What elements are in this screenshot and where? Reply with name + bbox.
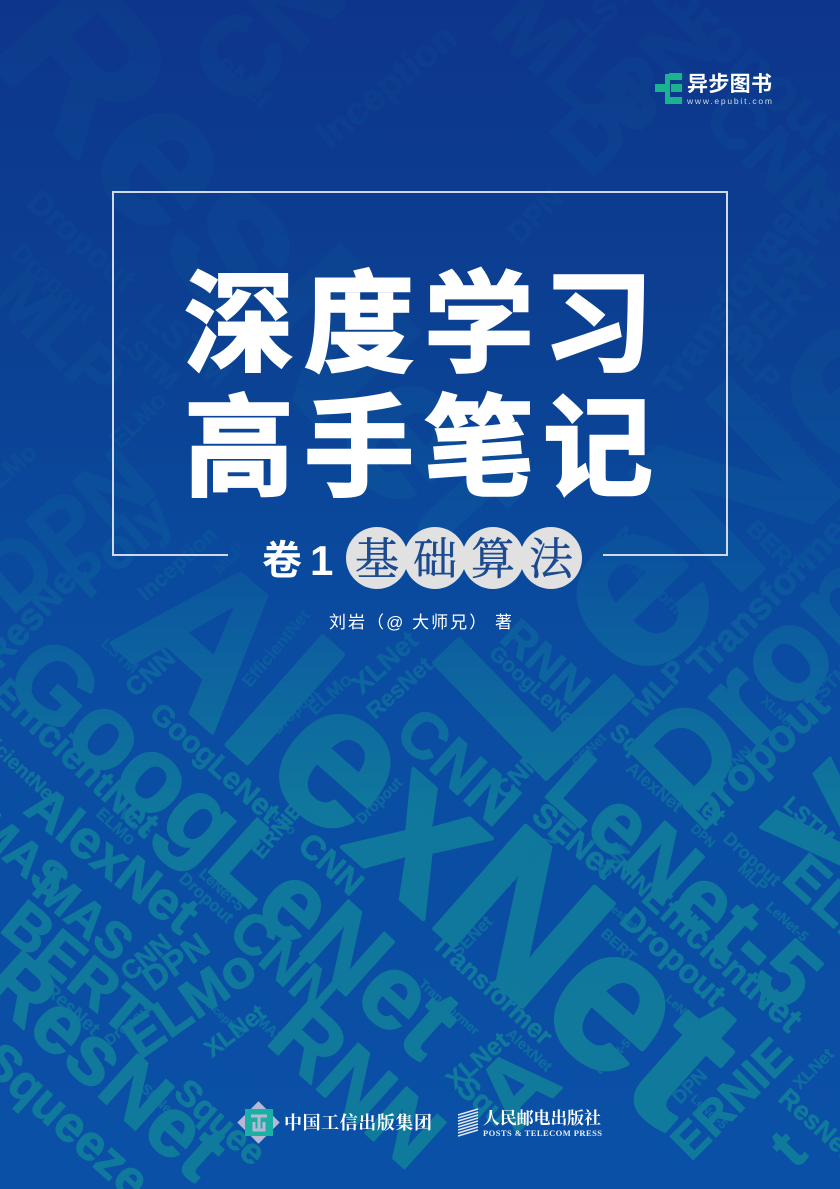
medium words lower right: LeNet-5 — [592, 1036, 633, 1077]
faint upper words: ELMo — [104, 386, 172, 454]
icon: green E cross mark — [655, 73, 682, 104]
medium words lower right: Dropout — [613, 900, 733, 1013]
medium words lower right: SENet — [526, 795, 624, 886]
medium words lower right: ERNIE — [661, 1029, 803, 1170]
medium words lower right: SENet — [569, 729, 610, 770]
title line 1: 深度学习 — [184, 264, 653, 387]
medium words lower right: GoogLeNet — [492, 838, 552, 898]
medium words lower left: ERNIE — [248, 799, 307, 863]
medium words lower left: SENet — [138, 1080, 180, 1120]
medium words lower left: DPN — [136, 926, 216, 999]
medium words lower left: Squee — [167, 1070, 274, 1173]
faint upper words: LeNet — [195, 36, 279, 116]
faint upper words: MLP — [209, 539, 248, 578]
faint upper words: LSTM — [134, 295, 239, 396]
title line 2: 高手笔记 — [184, 388, 653, 511]
medium words lower left: MAS — [23, 858, 144, 972]
press english name: POSTS & TELECOM PRESS — [483, 1128, 602, 1138]
faint upper words: LSTM — [792, 446, 835, 489]
medium words lower right: LeNet-5 — [688, 1092, 730, 1132]
large word: AlexNet: AlexNet — [80, 505, 785, 1166]
medium words lower right: BERT — [597, 925, 639, 965]
group name: 中国工信出版集团 — [284, 1112, 432, 1133]
faint upper words: VGG — [767, 421, 804, 458]
faint upper words: MLP — [715, 324, 788, 398]
medium words lower left: LSTM — [97, 635, 141, 677]
author: 刘岩（@ 大师兄） 著 — [329, 613, 512, 632]
logo url: www.epubit.com — [686, 96, 772, 106]
volume label — [262, 537, 333, 584]
publisher logo: China industry group — [237, 1101, 432, 1144]
medium words lower right: LeNet-5 — [763, 898, 812, 945]
medium words lower right: DPN — [688, 821, 718, 851]
medium words lower right: RNN — [721, 743, 756, 778]
faint upper words: SENet — [741, 389, 795, 445]
medium words lower left: Dropout — [102, 999, 157, 1049]
medium words lower right: LSTM — [779, 791, 840, 850]
medium words lower right: LeNet-5 — [663, 992, 705, 1032]
title frame — [113, 192, 727, 555]
medium words lower left: XLNet — [199, 999, 271, 1063]
medium words lower right: RNN — [491, 609, 600, 714]
medium words lower right: AlexNet — [502, 1025, 555, 1075]
medium words lower right: Squ — [450, 1071, 515, 1133]
medium words lower left: ELMo — [304, 670, 357, 720]
volume label: 卷 — [262, 539, 302, 583]
medium words lower left: CNN — [119, 642, 181, 702]
medium words lower right: SqueezeNet — [604, 718, 731, 831]
medium words lower left: RNN — [251, 983, 462, 1187]
medium words lower right: NIN — [608, 854, 657, 902]
medium words lower right: A — [454, 1025, 579, 1150]
medium words lower left: Inception — [203, 998, 248, 1040]
medium words lower left: CNN — [218, 897, 350, 1025]
faint upper words: Inception — [133, 522, 222, 606]
faint upper words: BERT — [715, 247, 840, 372]
medium words lower right: Transformer — [416, 976, 482, 1038]
faint upper words: Dropout — [6, 237, 101, 327]
subtitle text: 基础算法 — [355, 535, 574, 584]
medium words lower left: MAS — [252, 1012, 288, 1047]
faint upper words: Transformer — [617, 549, 701, 633]
medium words lower right: SENet — [447, 912, 496, 961]
press name: 人民邮电出版社 — [483, 1109, 601, 1128]
publisher logo: Posts and Telecom Press — [458, 1109, 602, 1138]
medium words lower left — [0, 606, 462, 1189]
faint upper words: NIN — [611, 522, 653, 564]
medium words lower left: Dropout — [175, 869, 237, 927]
medium words lower left: ELMo — [263, 803, 299, 838]
faint upper words: DPN — [502, 182, 570, 250]
faint upper words: Inception — [309, 16, 465, 157]
medium words lower left: LeNet-5 — [195, 865, 248, 915]
medium words lower right: GoogLeNet — [485, 642, 584, 734]
medium words lower left: ResNet — [41, 980, 104, 1040]
medium words lower left: ELMo — [112, 936, 267, 1070]
medium words lower right: CNN — [519, 830, 563, 874]
medium words lower right — [383, 500, 840, 1179]
medium words lower left: VGG — [114, 804, 155, 843]
medium words lower left: GoogLeNet — [143, 697, 286, 829]
medium words lower right: XLNet — [441, 1026, 515, 1095]
icon: diamond and seal — [237, 1101, 280, 1144]
volume label: 1 — [310, 537, 333, 584]
medium words lower right: Transformer — [426, 927, 559, 1051]
faint upper words: BERT — [741, 514, 809, 582]
medium words lower left: AlexNet — [15, 774, 210, 945]
medium words lower right: CNN — [593, 840, 634, 883]
medium words lower right: ResNet — [603, 898, 639, 933]
medium words lower left: CNN — [115, 927, 177, 987]
medium words lower right: MLP — [626, 654, 693, 723]
title — [184, 264, 653, 511]
medium words lower left: Dropout — [353, 775, 406, 828]
medium words lower right: XLNet — [789, 1044, 838, 1093]
medium words lower right: MLP — [734, 860, 771, 896]
medium words lower left: Dropout — [269, 685, 322, 738]
medium words lower left: ResNet — [361, 651, 437, 724]
medium words lower right: XLNet — [758, 692, 799, 732]
medium words lower right: CNN — [383, 693, 534, 839]
faint upper words — [0, 0, 840, 676]
medium words lower right: AlexNet — [622, 758, 687, 816]
icon: stacked book — [458, 1109, 478, 1136]
medium words lower left: XLNet — [346, 625, 424, 699]
logo name: 异步图书 — [687, 73, 772, 96]
medium words lower right: EfficientNet — [523, 929, 586, 999]
medium words lower right: EfficientNet — [635, 875, 811, 1040]
medium words lower left: ELMo — [92, 804, 139, 849]
subtitle circles — [346, 527, 582, 589]
publisher logo: epubit — [655, 73, 772, 106]
medium words lower right: CNN — [489, 746, 548, 804]
medium words lower right: Dropout — [674, 678, 839, 839]
medium words lower right: DPN — [669, 1065, 712, 1109]
medium words lower left: CNN — [291, 826, 371, 903]
faint upper words: Dropout — [20, 183, 143, 299]
medium word: LeNet-5: LeNet-5 — [528, 734, 840, 1029]
medium words lower left: EfficientNet — [239, 606, 314, 691]
faint upper words: Poly — [54, 483, 184, 609]
faint upper words: LSTM — [108, 321, 185, 395]
faint upper words: Transformer — [646, 189, 816, 405]
medium words lower right: Dropout — [719, 828, 785, 890]
medium words lower right: t — [757, 1118, 818, 1179]
